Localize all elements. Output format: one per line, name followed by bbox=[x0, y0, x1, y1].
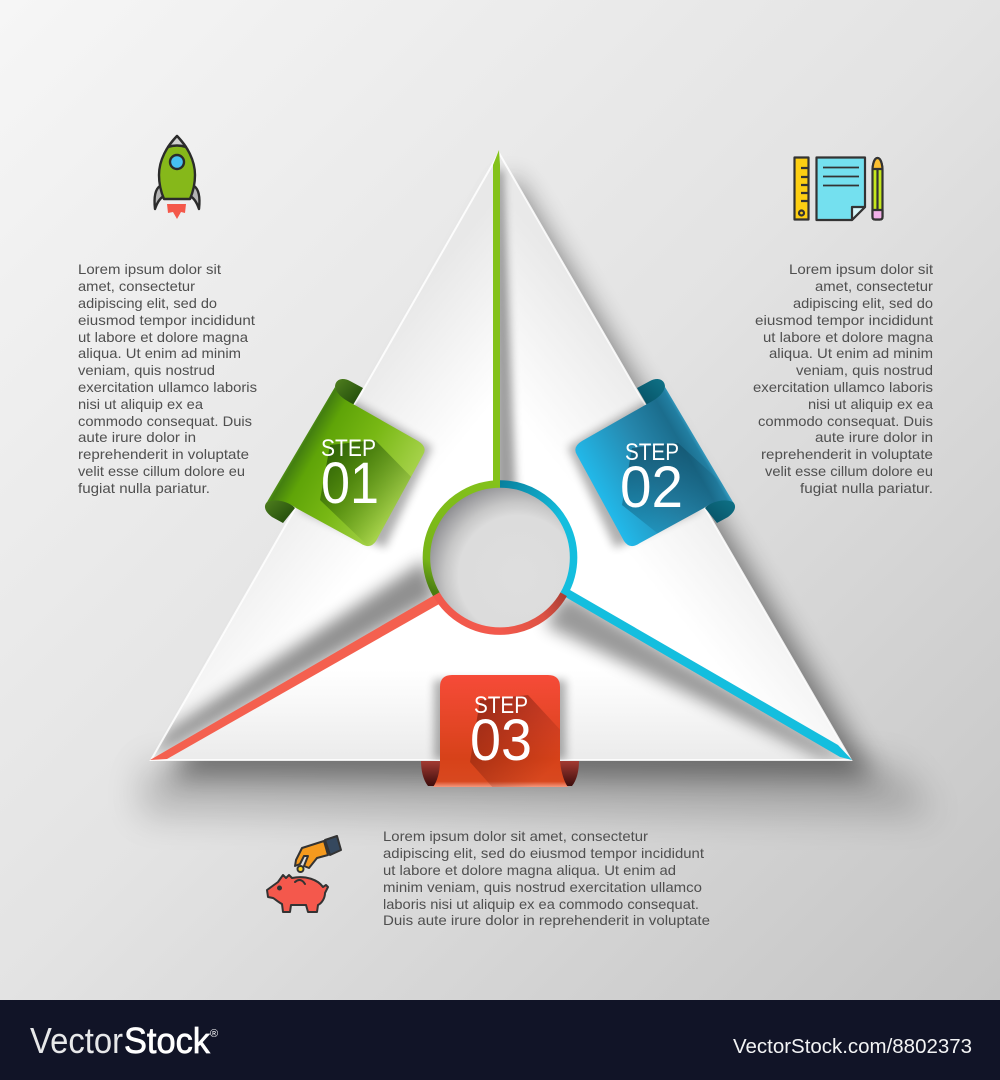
text block: bottom: minim veniam, quis nostrud exercitation ullamco bbox=[383, 879, 702, 895]
label STEP 01: STEP bbox=[321, 435, 376, 462]
ring: green arc bbox=[426, 484, 500, 594]
icon: hand and piggy bank bbox=[267, 836, 341, 912]
text block: bottom: ut labore et dolore magna aliqua. Ut enim ad bbox=[383, 862, 676, 878]
text block: left: commodo consequat. Duis bbox=[78, 413, 252, 429]
blue spoke bbox=[562, 590, 852, 760]
text block: bottom bbox=[383, 828, 710, 928]
text block: right: amet, consectetur bbox=[815, 278, 933, 294]
pencil bbox=[872, 158, 882, 220]
text block: left: adipiscing elit, sed do bbox=[78, 295, 217, 311]
text block: right: veniam, quis nostrud bbox=[796, 362, 933, 378]
label STEP 03: STEP bbox=[474, 692, 528, 719]
ribbon curl bottom bbox=[705, 500, 735, 523]
ring: red arc bbox=[436, 594, 564, 631]
panel: bottom segment bbox=[151, 592, 851, 760]
triangle drop shadow bbox=[140, 175, 935, 815]
piggy eye bbox=[278, 886, 281, 890]
paper bbox=[816, 158, 865, 220]
text block: right: nisi ut aliquip ex ea bbox=[808, 396, 933, 412]
footer url: VectorStock.com/8802373 bbox=[733, 1036, 972, 1058]
label STEP 02: STEP bbox=[625, 439, 679, 466]
number 02: 02 bbox=[620, 455, 683, 520]
text block: right: aute irure dolor in bbox=[815, 429, 933, 445]
text block: right: fugiat nulla pariatur. bbox=[800, 480, 933, 496]
panel: left segment bbox=[150, 153, 499, 760]
text block: bottom: laboris nisi ut aliquip ex ea commodo consequat. bbox=[383, 896, 699, 912]
center hole bbox=[428, 486, 572, 630]
number 01: 01 bbox=[321, 451, 379, 516]
text block: right: eiusmod tempor incididunt bbox=[755, 312, 933, 328]
footer bar bbox=[0, 1000, 1000, 1080]
text block: left: eiusmod tempor incididunt bbox=[78, 312, 255, 328]
ring: blue arc bbox=[500, 484, 574, 594]
ribbon curl bottom bbox=[265, 500, 295, 523]
piggy slot bbox=[295, 880, 305, 884]
text block: left: reprehenderit in voluptate bbox=[78, 446, 249, 462]
text block: right: reprehenderit in voluptate bbox=[761, 446, 933, 462]
piggy bbox=[267, 875, 328, 912]
ruler bbox=[794, 158, 808, 220]
ribbon body bbox=[267, 387, 425, 546]
text block: left: amet, consectetur bbox=[78, 278, 195, 294]
text block: left: veniam, quis nostrud bbox=[78, 362, 215, 378]
footer logo: Vector bbox=[30, 1020, 123, 1061]
ribbon curl left bbox=[421, 761, 441, 786]
text block: right: exercitation ullamco laboris bbox=[753, 379, 933, 395]
ribbon body bbox=[575, 387, 733, 546]
long shadow bbox=[622, 443, 720, 533]
text block: left: nisi ut aliquip ex ea bbox=[78, 396, 203, 412]
coin bbox=[298, 866, 304, 872]
text block: right: adipiscing elit, sed do bbox=[793, 295, 933, 311]
footer logo: ® bbox=[210, 1028, 218, 1040]
ribbon: step 01 bbox=[265, 379, 425, 546]
ribbon: step 03 bbox=[421, 675, 579, 790]
text block: left: ut labore et dolore magna bbox=[78, 329, 248, 345]
text block: right: aliqua. Ut enim ad minim bbox=[769, 345, 933, 361]
hand bbox=[295, 841, 328, 868]
ribbon curl top bbox=[637, 379, 665, 405]
text block: left: aute irure dolor in bbox=[78, 429, 196, 445]
text block: left: velit esse cillum dolore eu bbox=[78, 463, 245, 479]
green spoke bbox=[493, 150, 500, 483]
text block: left: aliqua. Ut enim ad minim bbox=[78, 345, 241, 361]
number 03: 03 bbox=[470, 708, 532, 773]
text block: left: Lorem ipsum dolor sit bbox=[78, 261, 221, 277]
text block: right: commodo consequat. Duis bbox=[758, 413, 933, 429]
panel: right segment bbox=[495, 153, 851, 760]
text block: left: fugiat nulla pariatur. bbox=[78, 480, 210, 496]
text block: right bbox=[753, 261, 933, 496]
icon: rocket bbox=[155, 136, 199, 219]
ribbon curl right bbox=[559, 761, 579, 786]
ribbon: step 02 bbox=[575, 379, 735, 548]
text block: left: exercitation ullamco laboris bbox=[78, 379, 257, 395]
text block: right: ut labore et dolore magna bbox=[763, 329, 933, 345]
long shadow bbox=[320, 440, 411, 540]
text block: bottom: adipiscing elit, sed do eiusmod tempor incididunt bbox=[383, 845, 704, 861]
text block: right: velit esse cillum dolore eu bbox=[765, 463, 933, 479]
cuff bbox=[325, 836, 341, 855]
text block: bottom: Duis aute irure dolor in reprehenderit in voluptate bbox=[383, 912, 710, 928]
footer logo: Stock bbox=[124, 1020, 211, 1061]
text block: bottom: Lorem ipsum dolor sit amet, consectetur bbox=[383, 828, 648, 844]
ribbon curl top bbox=[335, 379, 363, 405]
footer logo bbox=[30, 1020, 218, 1061]
ribbon shadows bbox=[300, 400, 700, 760]
red spoke bbox=[150, 593, 441, 760]
triangle diagram bbox=[150, 150, 852, 760]
long shadow bbox=[470, 695, 565, 790]
triangle outline highlight bbox=[151, 153, 851, 760]
text block: right: Lorem ipsum dolor sit bbox=[789, 261, 933, 277]
icon: ruler, paper and pencil bbox=[794, 158, 882, 220]
text block: left bbox=[78, 261, 257, 496]
ribbon body bbox=[433, 675, 568, 787]
